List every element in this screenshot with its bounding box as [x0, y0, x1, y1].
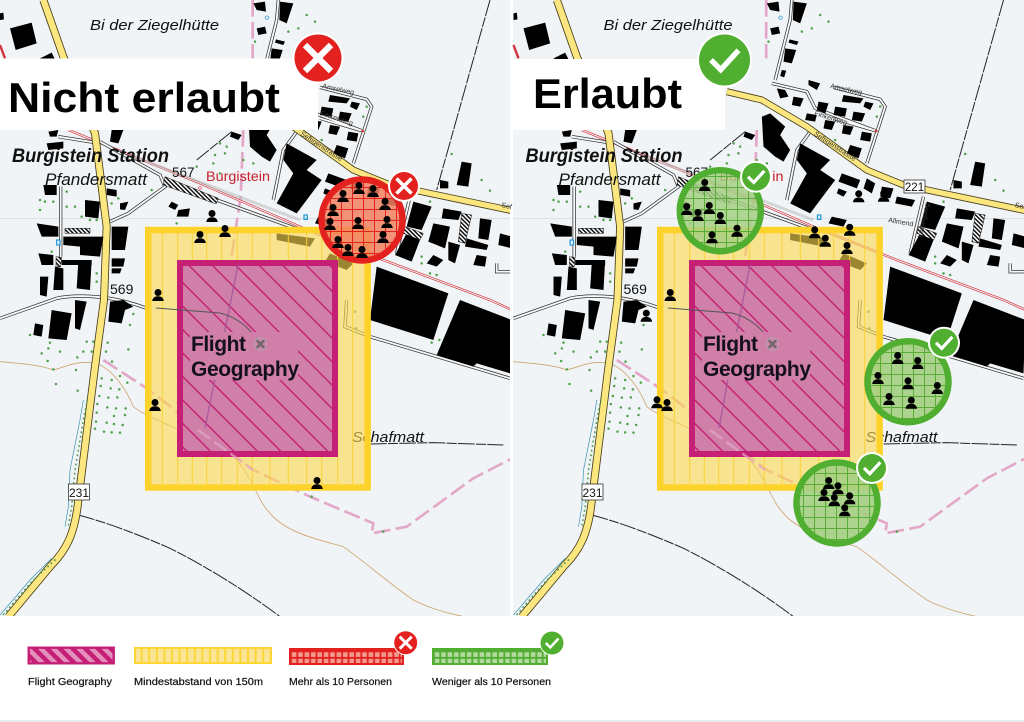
label: 567: 567: [686, 165, 708, 180]
green crowd circle A: [680, 170, 761, 251]
legend: minimum distance: [134, 647, 272, 688]
legend: fewer than 10 people: Weniger als 10 Personen: [432, 677, 551, 688]
label: street names: Allmend: [888, 217, 914, 228]
label: street names: Amselweg: [830, 83, 863, 97]
label: street names: Finkenweg: [813, 110, 848, 127]
legend: minimum distance: Mindestabstand von 150m: [134, 677, 263, 688]
title: Erlaubt: [510, 59, 725, 130]
label: street names: [812, 83, 1024, 238]
red crowd circle: [322, 180, 402, 260]
label: street names: Amselweg: [322, 83, 355, 97]
green crowd circle C: [796, 462, 878, 544]
panel: right minimum distance zone: [660, 230, 880, 488]
hatched buildings: [56, 177, 472, 267]
buildings: [0, 2, 512, 373]
main roads: [0, 0, 512, 617]
trees: [30, 15, 490, 532]
label: Pfandersmatt: Pfandersmatt: [45, 170, 148, 189]
legend icon: red cross: [393, 630, 418, 655]
label: road number 231: 231: [69, 486, 89, 500]
green crowd circle B: [868, 341, 948, 422]
small blue markers: [57, 215, 307, 245]
panel: left map background: [0, 0, 510, 616]
flight geography label: Geography: [703, 358, 811, 381]
panel: right flight geography: [668, 263, 847, 470]
flight geography drone icon: [766, 338, 778, 350]
legend: flight geography: Flight Geography: [28, 677, 112, 688]
badge: green check A: [740, 161, 772, 193]
panel: right map background: [513, 0, 1024, 616]
flight geography label: Flight: [703, 333, 758, 356]
label: street names: Finkenweg: [319, 110, 354, 127]
legend: flight geography: [28, 647, 114, 688]
title: Nicht erlaubt: [0, 58, 318, 130]
label: road number 231: 231: [582, 486, 603, 500]
panel: left flight geography: [156, 263, 335, 470]
label: Pfandersmatt: Pfandersmatt: [558, 170, 662, 189]
legend icon: green check: [540, 630, 564, 656]
label: Burgistein Station: Burgistein Station: [526, 146, 682, 167]
label: Burgistein red: Burgistein: [206, 169, 270, 184]
minor roads: [0, 0, 512, 378]
label: Bi der Ziegelhütte: Bi der Ziegelhütte: [604, 17, 732, 34]
label: street names: Sef: [501, 202, 512, 211]
legend: more than 10 people: [289, 648, 404, 688]
label: Schafmatt: Schafmatt: [352, 430, 425, 446]
label: Schafmatt: Schafmatt: [866, 430, 939, 446]
label: street names: Seftigenstrasse: [812, 131, 857, 163]
panel: right map labels: [526, 17, 1024, 500]
legend: fewer than 10 people: [432, 648, 551, 688]
panel: left map labels: [12, 17, 512, 500]
label: 569: 569: [110, 281, 134, 297]
people left panel: [149, 182, 393, 489]
flight geography drone icon: [254, 338, 266, 350]
label: street names: Ludwigweg: [917, 203, 931, 238]
label: Bi der Ziegelhütte: Bi der Ziegelhütte: [90, 17, 219, 34]
badge: red cross small: [388, 170, 420, 202]
title: Erlaubt: Erlaubt: [533, 70, 682, 117]
contour and paths: [0, 0, 512, 617]
label: road number 221: 221: [905, 182, 924, 194]
label: 567: 567: [172, 165, 195, 180]
base map: right: [514, 0, 1024, 617]
label: Burgistein Station: Burgistein Station: [12, 146, 169, 167]
flight geography label: Geography: [191, 358, 299, 381]
icon: large green check: [697, 32, 752, 88]
panel: legend: [28, 630, 564, 688]
label: 569: 569: [624, 281, 647, 297]
badge: green check B: [928, 327, 960, 359]
badge: green check C: [856, 452, 888, 484]
icon: large red cross: [292, 32, 344, 84]
people right panel: [640, 179, 943, 516]
flight geography label: Flight: [191, 333, 246, 356]
base map: left: [0, 0, 512, 617]
legend: more than 10 people: Mehr als 10 Personen: [289, 677, 392, 688]
label: street names: Seftigenstrasse: [299, 131, 343, 163]
panel: left minimum distance zone: [148, 230, 368, 488]
label: street names: [299, 83, 512, 211]
label: Burgistein red: Burgistein: [720, 169, 784, 184]
title: Nicht erlaubt: Nicht erlaubt: [8, 74, 280, 121]
